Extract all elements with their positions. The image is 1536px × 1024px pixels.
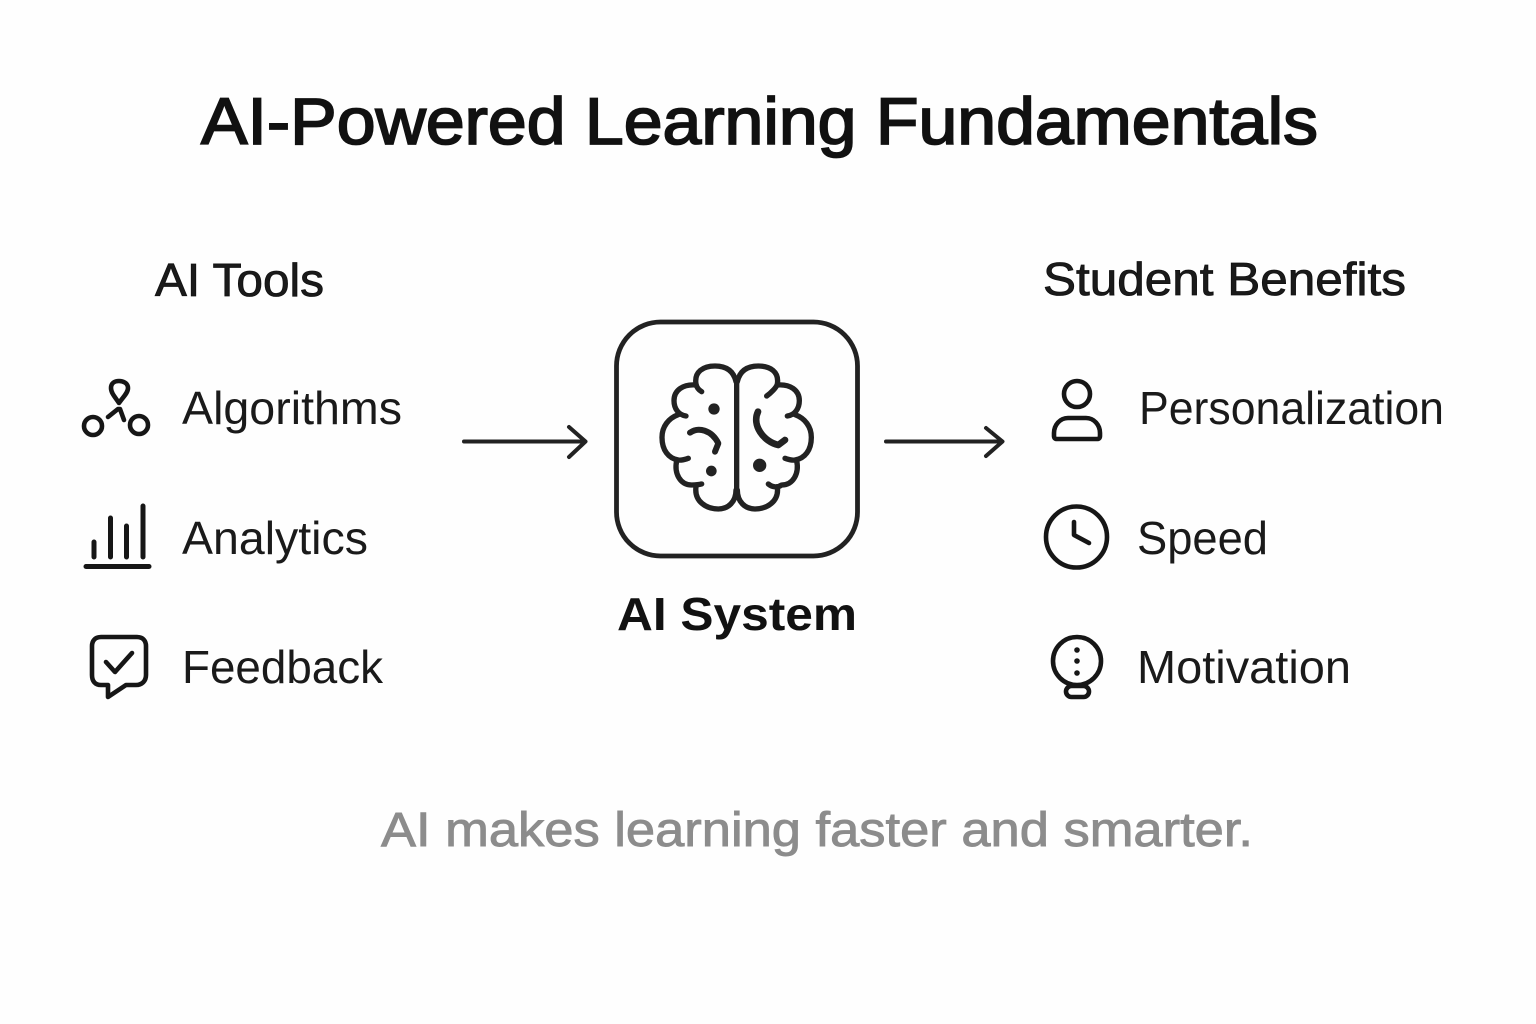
item: Feedback bbox=[92, 637, 384, 697]
arrow: tools to system bbox=[464, 427, 586, 457]
panel: AI system bbox=[616, 322, 858, 640]
icon: brain in rounded box bbox=[616, 322, 858, 556]
tagline: AI makes learning faster and smarter. bbox=[381, 804, 1253, 857]
icon: bar chart bbox=[86, 506, 149, 566]
label: Personalization: Personalization bbox=[1139, 382, 1444, 434]
item: Analytics bbox=[86, 506, 368, 566]
label: Algorithms: Algorithms bbox=[182, 382, 402, 434]
label: Analytics: Analytics bbox=[182, 512, 368, 564]
label: Speed: Speed bbox=[1137, 512, 1268, 564]
arrow: system to benefits bbox=[886, 428, 1002, 456]
icon: motivation bulb bbox=[1053, 637, 1101, 697]
panel: student benefits bbox=[1043, 253, 1444, 697]
item: Speed bbox=[1046, 506, 1268, 568]
label: Feedback: Feedback bbox=[182, 641, 384, 693]
icon: speech bubble with check bbox=[92, 637, 146, 697]
heading: AI Tools: AI Tools bbox=[155, 254, 324, 306]
item: Algorithms bbox=[84, 381, 402, 435]
title: AI-Powered Learning Fundamentals bbox=[201, 84, 1318, 158]
icon: algorithm nodes bbox=[84, 381, 148, 435]
label: AI System: AI System bbox=[617, 588, 857, 640]
label: Motivation: Motivation bbox=[1137, 641, 1351, 693]
icon: person bbox=[1054, 381, 1100, 439]
icon: clock bbox=[1046, 506, 1107, 568]
item: Personalization bbox=[1054, 381, 1444, 439]
panel: AI tools bbox=[84, 254, 402, 697]
heading: Student Benefits: Student Benefits bbox=[1043, 253, 1406, 305]
item: Motivation bbox=[1053, 637, 1351, 697]
